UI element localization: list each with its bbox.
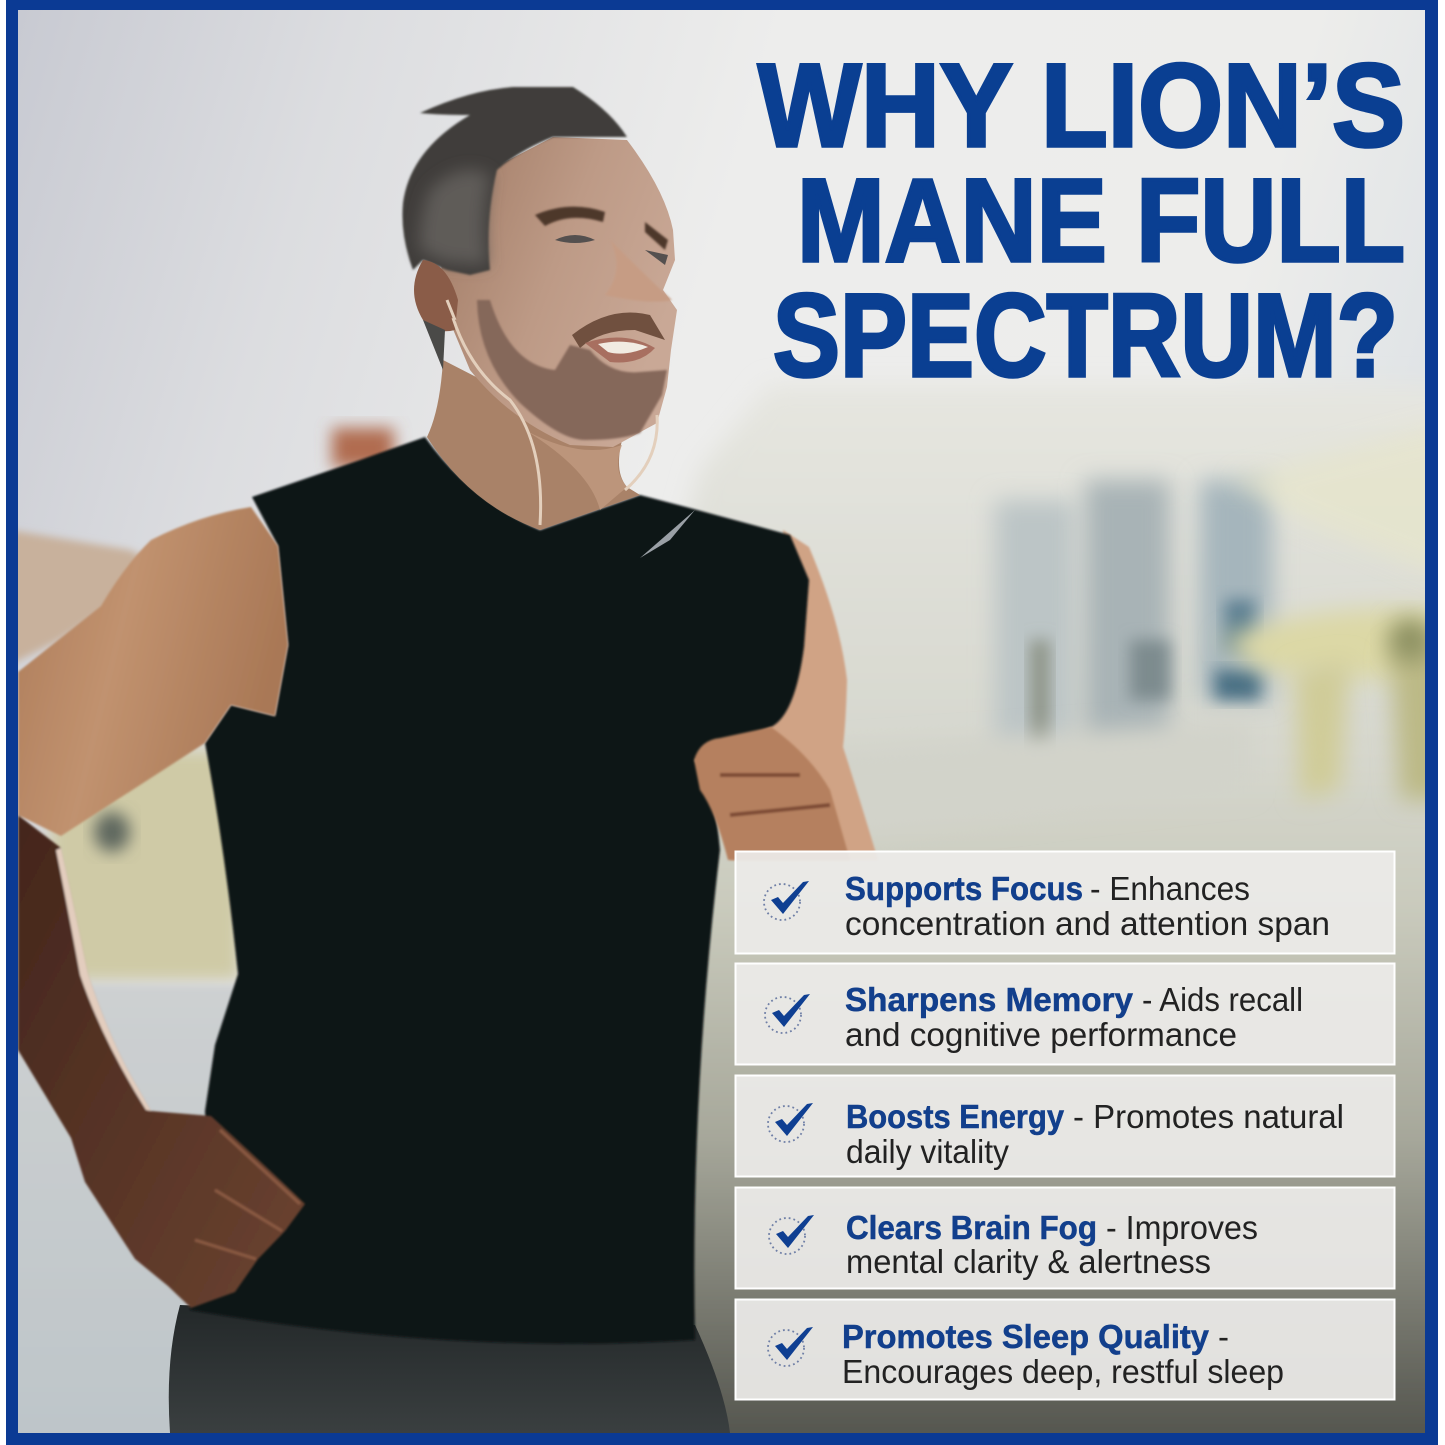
- shorts: [169, 1305, 730, 1433]
- head and face: [440, 137, 677, 447]
- text: Clears Brain Fog: [846, 1209, 1097, 1246]
- forearm and hand: [18, 815, 305, 1308]
- panel: supports focus: [736, 852, 1394, 954]
- grey temple hair: [420, 170, 490, 265]
- neck shadow: [525, 430, 627, 510]
- icon: check: [764, 881, 809, 920]
- panel: boosts energy: daily vitality: [846, 1133, 1009, 1170]
- sky background: [18, 10, 1425, 992]
- icon: check: [768, 1327, 813, 1366]
- mouth: [585, 338, 655, 362]
- ear: [414, 260, 458, 331]
- text: Boosts Energy: [846, 1098, 1065, 1135]
- panel: promotes sleep quality: [736, 1300, 1394, 1400]
- hair: [402, 87, 627, 275]
- blurred house on the right: [689, 390, 1425, 1433]
- forearm rim light: [56, 848, 151, 1111]
- icon: check: [768, 1103, 813, 1142]
- blurred house on the left: [0, 428, 394, 1445]
- panel: sharpens memory: and cognitive performance: [845, 1016, 1237, 1053]
- beard: [477, 300, 667, 440]
- panel: boosts energy: [736, 1076, 1394, 1176]
- panel: clears brain fog: mental clarity & alertness: [846, 1243, 1211, 1280]
- panel: promotes sleep quality: Encourages deep, restful sleep: [842, 1353, 1284, 1390]
- neck: [427, 360, 640, 530]
- panel: boosts energy: - Promotes natural: [1073, 1098, 1344, 1135]
- title line 1: WHY LION’S: [758, 40, 1405, 172]
- eyes: [555, 235, 668, 265]
- shirt highlight: [640, 510, 695, 558]
- title: [758, 40, 1405, 402]
- panel: clears brain fog: [736, 1188, 1394, 1288]
- behind-ear hair: [423, 320, 445, 370]
- text: Sharpens Memory: [845, 981, 1134, 1018]
- panel: clears brain fog: - Improves: [1106, 1209, 1258, 1246]
- text: Promotes Sleep Quality: [842, 1318, 1210, 1355]
- text: Supports Focus: [845, 870, 1083, 907]
- earbud and cable: [447, 300, 657, 525]
- panel: sharpens memory: [736, 964, 1394, 1064]
- icon: check: [765, 994, 810, 1033]
- panel: supports focus: - Enhances: [1090, 870, 1250, 907]
- moustache: [572, 312, 665, 348]
- man's far hand: [694, 727, 850, 860]
- panel: supports focus: concentration and attention span: [845, 905, 1330, 942]
- man's near arm and hand: [18, 507, 305, 1308]
- blurred palm foliage: [1218, 433, 1425, 813]
- brows: [535, 207, 668, 250]
- panel: sharpens memory: - Aids recall: [1142, 981, 1303, 1018]
- upper arm: [18, 507, 288, 836]
- man's far arm: [730, 530, 878, 860]
- black sleeveless shirt: [190, 437, 809, 1344]
- icon: check: [769, 1215, 814, 1254]
- teeth: [598, 342, 648, 354]
- finger creases: [195, 1130, 300, 1259]
- panel: promotes sleep quality: -: [1218, 1318, 1229, 1355]
- nose: [608, 249, 672, 302]
